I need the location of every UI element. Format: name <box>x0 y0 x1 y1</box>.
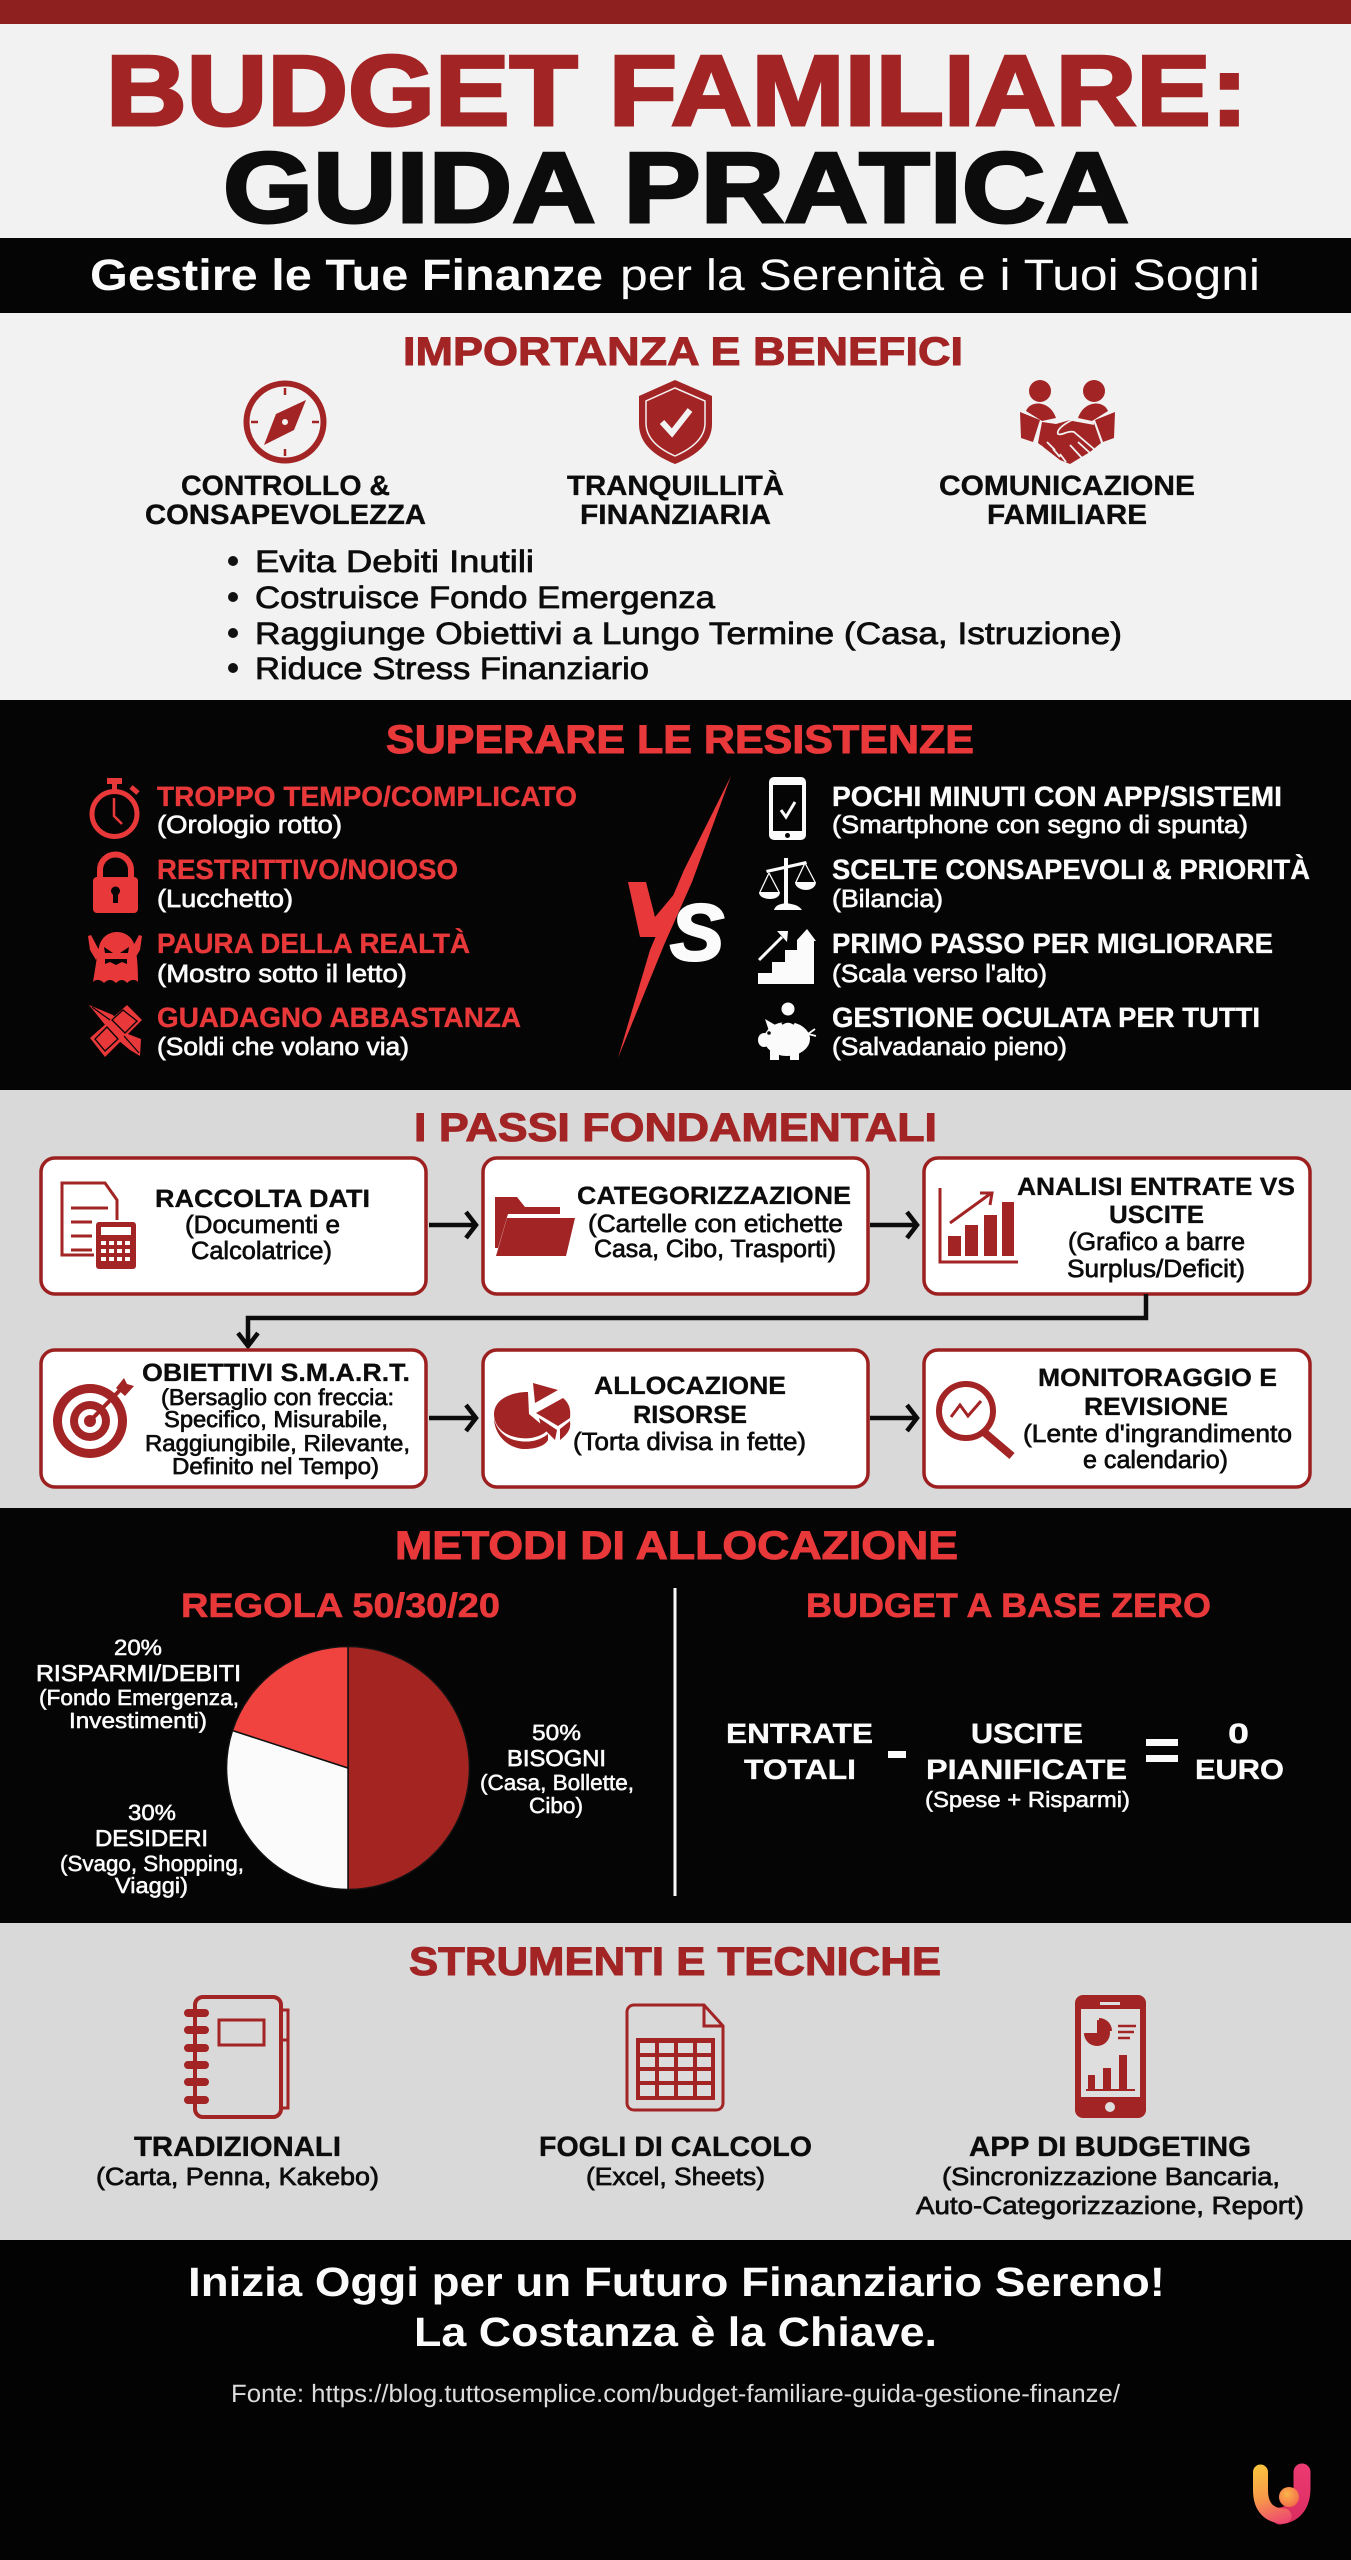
step: monitoraggio <box>924 1350 1310 1487</box>
subheading: base zero: BUDGET A BASE ZERO <box>806 1587 1211 1625</box>
label: controllo <box>145 470 426 530</box>
step text: (Torta divisa in fette) <box>573 1428 806 1456</box>
step text: Specifico, Misurabile, <box>164 1406 388 1432</box>
call to action <box>188 2259 1165 2355</box>
logo <box>1260 2472 1302 2516</box>
icon: magnifier <box>939 1384 1012 1456</box>
call to action: Inizia Oggi per un Futuro Finanziario Sereno! <box>188 2259 1165 2305</box>
step text <box>573 1372 806 1456</box>
icon: stopwatch <box>92 778 138 836</box>
icon: balance scale <box>759 858 816 910</box>
item: guadagno: (Soldi che volano via) <box>157 1033 409 1061</box>
item: troppo tempo <box>157 781 577 839</box>
item: scelte <box>832 854 1310 913</box>
step text: (Documenti e <box>185 1211 340 1239</box>
item: gestione <box>832 1002 1260 1061</box>
step text: Raggiungibile, Rilevante, <box>145 1430 410 1456</box>
bullet list <box>228 544 1122 686</box>
item: troppo tempo: (Orologio rotto) <box>157 811 342 839</box>
step text: (Grafico a barre <box>1068 1228 1245 1256</box>
subheading: regola: REGOLA 50/30/20 <box>181 1587 500 1625</box>
icon: padlock <box>93 854 138 913</box>
label: fogli di calcolo: (Excel, Sheets) <box>586 2163 765 2191</box>
icon: flying money <box>89 1005 142 1057</box>
icon: piggy bank <box>758 1002 816 1060</box>
panel: superare le resistenze <box>0 700 1351 1090</box>
pie label: desideri: (Svago, Shopping, <box>60 1851 244 1876</box>
title line 1: BUDGET FAMILIARE: <box>106 35 1248 147</box>
item: pochi minuti <box>832 781 1282 839</box>
connector arrow between rows <box>238 1294 1146 1346</box>
step text: ANALISI ENTRATE VS <box>1017 1173 1295 1201</box>
equation: zero based budget <box>726 1718 1284 1812</box>
step text: (Bersaglio con freccia: <box>161 1384 394 1410</box>
step text: e calendario) <box>1083 1446 1228 1474</box>
vs badge <box>628 880 724 977</box>
pie label: bisogni <box>480 1720 634 1818</box>
pie label: risparmi: RISPARMI/DEBITI <box>36 1660 241 1686</box>
heading: I PASSI FONDAMENTALI <box>414 1106 937 1150</box>
pie label: bisogni: (Casa, Bollette, <box>480 1770 634 1795</box>
label: comunicazione <box>939 470 1195 530</box>
step: allocazione <box>483 1350 868 1487</box>
item: troppo tempo: TROPPO TEMPO/COMPLICATO <box>157 781 577 812</box>
bullet list: Riduce Stress Finanziario <box>255 651 649 686</box>
arrow 2 <box>870 1212 917 1238</box>
equation: zero based budget: ENTRATE <box>726 1718 873 1749</box>
icon: document and calculator <box>62 1183 136 1269</box>
step: analisi <box>924 1158 1310 1294</box>
panel: footer <box>0 2240 1351 2560</box>
label: tranquillita: FINANZIARIA <box>580 499 771 530</box>
item: primo passo: (Scala verso l'alto) <box>832 960 1047 988</box>
step text: RACCOLTA DATI <box>155 1185 370 1213</box>
equation: zero based budget: 0 <box>1228 1718 1249 1749</box>
bullet list: Raggiunge Obiettivi a Lungo Termine (Casa, Istruzione) <box>255 616 1122 651</box>
step text <box>1017 1173 1295 1283</box>
label: comunicazione: COMUNICAZIONE <box>939 470 1195 501</box>
top accent bar <box>0 0 1351 24</box>
pie label: bisogni: 50% <box>532 1720 581 1745</box>
step text: Casa, Cibo, Trasporti) <box>594 1235 836 1263</box>
item: primo passo <box>832 928 1273 988</box>
icon: people handshake <box>1020 380 1115 464</box>
panel: metodi di allocazione <box>0 1508 1351 1923</box>
item: paura: (Mostro sotto il letto) <box>157 960 407 988</box>
step text <box>155 1185 370 1265</box>
heading: METODI DI ALLOCAZIONE <box>395 1524 958 1568</box>
subtitle bold: Gestire le Tue Finanze <box>90 251 603 300</box>
pie label: risparmi: 20% <box>114 1635 162 1660</box>
item: guadagno <box>157 1002 521 1061</box>
icon: shield with check <box>639 380 712 464</box>
arrow 1 <box>429 1212 476 1238</box>
label: tradizionali <box>96 2131 379 2191</box>
icon: notebook <box>188 1997 288 2117</box>
pie chart 50/30/20 <box>227 1646 470 1890</box>
item: primo passo: PRIMO PASSO PER MIGLIORARE <box>832 928 1273 959</box>
pie label: bisogni: Cibo) <box>529 1793 583 1818</box>
label: tranquillita: TRANQUILLITÀ <box>567 470 784 501</box>
label: app di budgeting: (Sincronizzazione Bancaria, <box>942 2163 1280 2191</box>
panel: header <box>0 0 1351 244</box>
icon: compass <box>246 384 324 460</box>
pie label: desideri: DESIDERI <box>95 1825 208 1851</box>
icon: monster <box>88 932 142 983</box>
label: comunicazione: FAMILIARE <box>987 499 1147 530</box>
step text: CATEGORIZZAZIONE <box>577 1182 851 1210</box>
pie label: risparmi: (Fondo Emergenza, <box>39 1685 239 1710</box>
item: scelte: SCELTE CONSAPEVOLI & PRIORITÀ <box>832 854 1310 885</box>
icon: budgeting app phone <box>1075 1995 1146 2118</box>
call to action: La Costanza è la Chiave. <box>414 2309 937 2355</box>
step text <box>142 1359 410 1479</box>
step text: Definito nel Tempo) <box>172 1453 379 1479</box>
icon: spreadsheet <box>627 2005 723 2110</box>
item: scelte: (Bilancia) <box>832 885 943 913</box>
equation: zero based budget: EURO <box>1195 1754 1284 1785</box>
pie label: bisogni: BISOGNI <box>507 1745 606 1771</box>
heading: IMPORTANZA E BENEFICI <box>403 330 963 374</box>
label: tradizionali: (Carta, Penna, Kakebo) <box>96 2163 379 2191</box>
divider slash <box>618 776 731 1058</box>
item: guadagno: GUADAGNO ABBASTANZA <box>157 1002 521 1033</box>
equation: zero based budget: USCITE <box>971 1718 1083 1749</box>
equation: zero based budget: PIANIFICATE <box>926 1754 1127 1785</box>
icon: smartphone check <box>769 777 806 840</box>
bullet list: Evita Debiti Inutili <box>255 544 534 579</box>
item: gestione: GESTIONE OCULATA PER TUTTI <box>832 1002 1260 1033</box>
item: paura: PAURA DELLA REALTÀ <box>157 928 470 959</box>
item: restrittivo <box>157 854 458 913</box>
label: app di budgeting <box>916 2131 1304 2220</box>
step text: Surplus/Deficit) <box>1067 1255 1245 1283</box>
step text: REVISIONE <box>1084 1393 1228 1421</box>
equation: zero based budget: (Spese + Risparmi) <box>925 1787 1130 1812</box>
label: tranquillita <box>567 470 784 530</box>
icon: folder <box>495 1197 575 1256</box>
vertical divider <box>674 1588 676 1896</box>
step text: USCITE <box>1109 1201 1204 1229</box>
icon: target with arrow <box>53 1378 134 1458</box>
source line: Fonte: https://blog.tuttosemplice.com/budget-familiare-guida-gestione-finanze/ <box>231 2380 1120 2408</box>
label: controllo: CONTROLLO & <box>181 470 390 501</box>
step text: ALLOCAZIONE <box>594 1372 786 1400</box>
arrow 3 <box>429 1405 476 1431</box>
step text: OBIETTIVI S.M.A.R.T. <box>142 1359 410 1387</box>
step: raccolta dati <box>41 1158 426 1294</box>
item: gestione: (Salvadanaio pieno) <box>832 1033 1067 1061</box>
step text: MONITORAGGIO E <box>1038 1364 1277 1392</box>
icon: stairs up <box>758 929 816 984</box>
pie label: desideri: Viaggi) <box>115 1873 188 1898</box>
vs badge: S <box>670 888 724 977</box>
step: obiettivi smart <box>41 1350 426 1487</box>
step text: (Cartelle con etichette <box>588 1210 843 1238</box>
item: paura <box>157 928 470 988</box>
item: pochi minuti: (Smartphone con segno di spunta) <box>832 811 1248 839</box>
pie label: desideri: 30% <box>128 1800 176 1825</box>
step text <box>1023 1364 1292 1474</box>
label: tradizionali: TRADIZIONALI <box>134 2131 341 2162</box>
panel: importanza e benefici <box>0 313 1351 700</box>
label: app di budgeting: APP DI BUDGETING <box>969 2131 1251 2162</box>
icon: bar chart <box>940 1188 1018 1262</box>
bullet list: Costruisce Fondo Emergenza <box>255 580 716 615</box>
panel: i passi fondamentali <box>0 1090 1351 1508</box>
step: categorizzazione <box>483 1158 868 1294</box>
panel: strumenti e tecniche <box>0 1923 1351 2240</box>
label: fogli di calcolo: FOGLI DI CALCOLO <box>539 2131 812 2162</box>
title line 2: GUIDA PRATICA <box>223 132 1129 244</box>
subtitle regular: per la Serenità e i Tuoi Sogni <box>620 251 1260 300</box>
arrow 4 <box>870 1405 917 1431</box>
pie label: risparmi: Investimenti) <box>69 1708 207 1733</box>
heading: STRUMENTI E TECNICHE <box>409 1940 941 1984</box>
panel: subtitle band <box>0 238 1351 313</box>
step text <box>577 1182 851 1263</box>
heading: SUPERARE LE RESISTENZE <box>386 718 974 762</box>
item: restrittivo: (Lucchetto) <box>157 885 293 913</box>
pie label: desideri <box>60 1800 244 1898</box>
label: controllo: CONSAPEVOLEZZA <box>145 499 426 530</box>
label: fogli di calcolo <box>539 2131 812 2191</box>
equation: zero based budget: TOTALI <box>744 1754 856 1785</box>
step text: Calcolatrice) <box>191 1237 332 1265</box>
label: app di budgeting: Auto-Categorizzazione, Report) <box>916 2192 1304 2220</box>
item: restrittivo: RESTRITTIVO/NOIOSO <box>157 854 458 885</box>
step text: RISORSE <box>633 1401 747 1429</box>
icon: pie slices <box>494 1383 570 1449</box>
item: pochi minuti: POCHI MINUTI CON APP/SISTEMI <box>832 781 1282 812</box>
step text: (Lente d'ingrandimento <box>1023 1420 1292 1448</box>
pie label: risparmi <box>36 1635 241 1733</box>
